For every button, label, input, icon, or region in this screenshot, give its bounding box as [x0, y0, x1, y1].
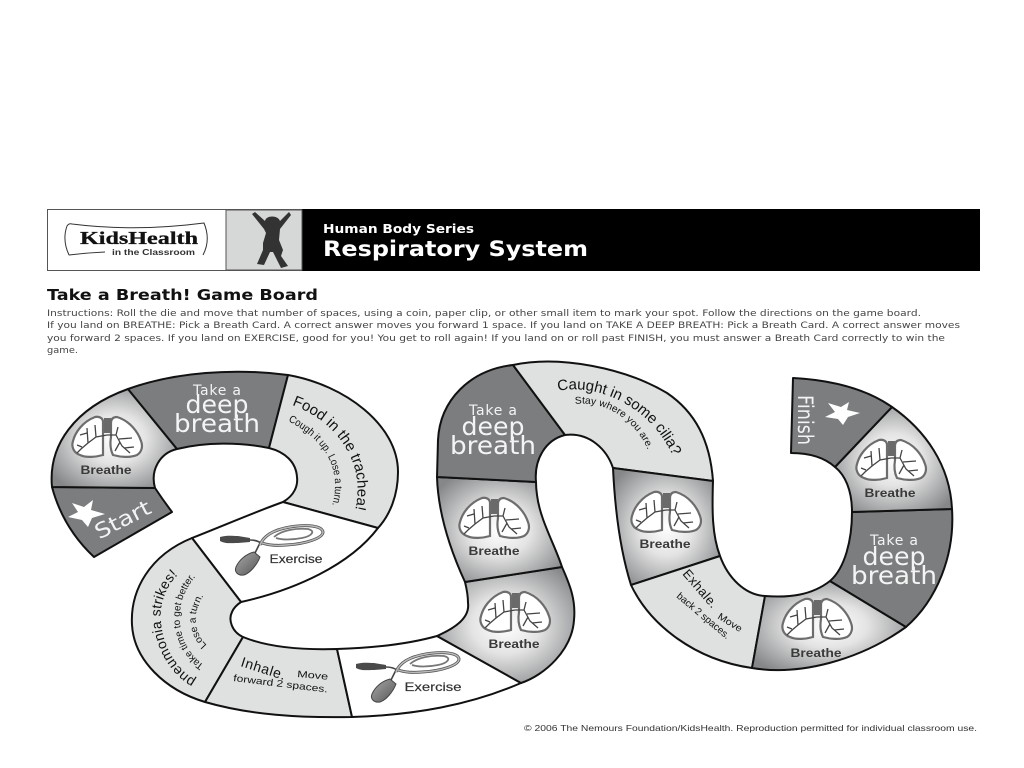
- space: exhale: Move: [715, 611, 744, 635]
- space: exercise 1: Exercise: [270, 552, 323, 566]
- instructions: you forward 2 spaces. If you land on EXERCISE, good for you! You get to roll again! If you land on or roll past FINISH, you must answer a Breath Card correctly to win the: [47, 334, 945, 344]
- space: take a deep breath 2: Take a: [468, 403, 517, 419]
- space: take a deep breath 1: [128, 372, 288, 449]
- space: take a deep breath 2: deep: [462, 412, 524, 441]
- space: caught in some cilia: Caught in some cilia?: [558, 380, 682, 453]
- space: take a deep breath 3: [830, 509, 952, 627]
- space: breathe 5: Breathe: [790, 646, 842, 660]
- space: pneumonia strikes: Take time to get better.: [174, 575, 202, 670]
- space: breathe 6: Breathe: [864, 486, 916, 500]
- space: exhale: Exhale.: [682, 569, 714, 608]
- instructions: game.: [47, 346, 78, 356]
- space: take a deep breath 3: Take a: [869, 533, 918, 549]
- space: exercise 1: [192, 502, 378, 602]
- space: breathe 1: [52, 389, 177, 488]
- space: caught in some cilia: Stay where you are.: [575, 396, 650, 449]
- copyright: © 2006 The Nemours Foundation/KidsHealth. Reproduction permitted for individual classroom use.: [524, 723, 977, 733]
- space: breathe 5: [752, 581, 906, 670]
- space: take a deep breath 1: Take a: [192, 383, 241, 399]
- space: pneumonia strikes: [130, 537, 244, 703]
- space: start: Start: [91, 495, 155, 544]
- header banner: [48, 209, 980, 271]
- space: breathe 2: [437, 477, 562, 582]
- space: breathe 4: [613, 468, 720, 585]
- space: take a deep breath 1: deep: [186, 390, 248, 419]
- space: finish: [791, 378, 892, 467]
- instructions: Instructions: Roll the die and move that number of spaces, using a coin, paper clip, or other small item to mark your spot. Follow the directions on the game board.: [47, 309, 921, 319]
- space: inhale: Move: [297, 669, 329, 683]
- logo panel: KidsHealth: [65, 223, 207, 257]
- space: pneumonia strikes: pneumonia strikes!: [152, 569, 197, 686]
- space: breathe 6: [835, 407, 952, 512]
- space: exhale: [630, 555, 765, 669]
- series label: Human Body Series: [323, 222, 474, 236]
- space: breathe 2: Breathe: [468, 544, 520, 558]
- space: breathe 3: [437, 567, 574, 683]
- space: exhale: back 2 spaces.: [674, 591, 732, 642]
- icon panel: jumping child silhouette: [226, 210, 302, 270]
- space: caught in some cilia: [512, 360, 714, 481]
- game board path: [50, 360, 954, 718]
- space: inhale: [204, 636, 352, 718]
- space: take a deep breath 1: breath: [174, 409, 260, 438]
- space: start: [52, 487, 172, 557]
- space: take a deep breath 3: deep: [862, 542, 926, 571]
- logo panel: KidsHealth: KidsHealth: [80, 228, 198, 248]
- space: food in the trachea: Food in the trachea!: [293, 396, 368, 510]
- space: exercise 2: Exercise: [404, 680, 462, 694]
- space: inhale: forward 2 spaces.: [233, 673, 328, 696]
- space: pneumonia strikes: Lose a turn.: [190, 596, 206, 650]
- space: breathe 1: Breathe: [80, 463, 132, 477]
- space: take a deep breath 2: breath: [450, 431, 536, 460]
- space: finish: Finish: [793, 395, 817, 445]
- banner title: Respiratory System: [323, 237, 588, 261]
- instructions: [47, 309, 960, 356]
- space: take a deep breath 3: breath: [851, 561, 937, 590]
- instructions: If you land on BREATHE: Pick a Breath Card. A correct answer moves you forward 1 space. If you land on TAKE A DEEP BREATH: Pick a Breath Card. A correct answer moves: [47, 321, 960, 331]
- space: breathe 4: Breathe: [640, 537, 691, 551]
- space: exercise 2: [337, 636, 521, 717]
- heading: Take a Breath! Game Board: [47, 286, 318, 304]
- space: inhale: Inhale.: [241, 657, 283, 680]
- space: food in the trachea: Cough it up. Lose a turn.: [290, 416, 342, 504]
- space: breathe 3: Breathe: [488, 637, 540, 651]
- space: take a deep breath 2: [437, 365, 565, 482]
- logo panel: KidsHealth: in the Classroom: [112, 247, 196, 257]
- space: food in the trachea: [268, 374, 399, 529]
